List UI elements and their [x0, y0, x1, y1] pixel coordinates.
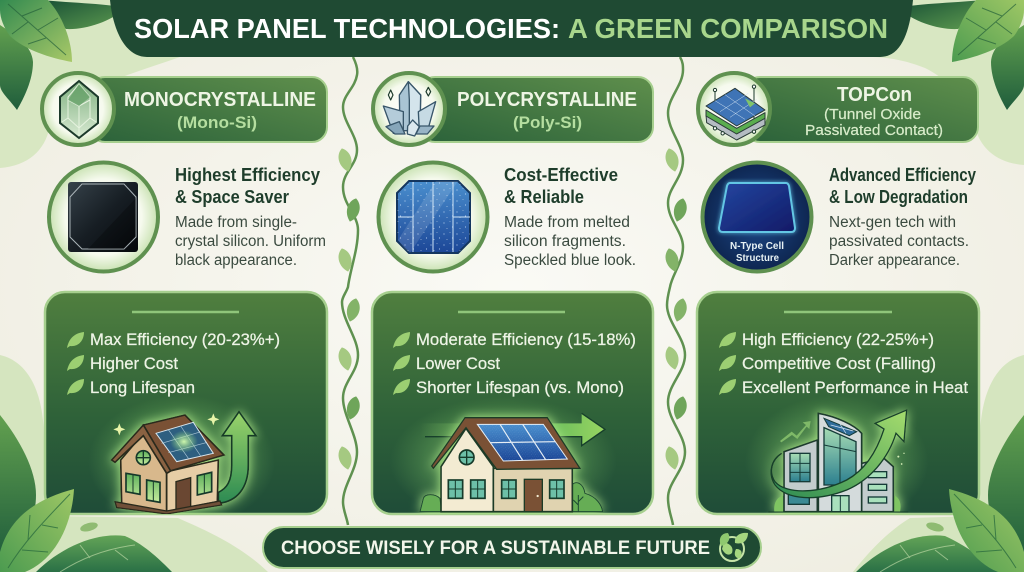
description: Next-gen tech with	[829, 214, 956, 231]
header pill: (Mono-Si)	[177, 113, 257, 132]
column: monocrystalline	[42, 73, 327, 528]
icon: n-type cell	[702, 162, 812, 272]
vine divider right	[663, 57, 689, 525]
heading: Highest Efficiency	[175, 165, 320, 185]
footer text: CHOOSE WISELY FOR A SUSTAINABLE FUTURE	[281, 538, 710, 559]
foreground leaf: bottom left	[0, 489, 74, 572]
heading	[504, 165, 618, 207]
header pill: TOPCon	[837, 84, 912, 106]
icon: layered cell	[698, 73, 770, 145]
column: polycrystalline	[372, 73, 653, 527]
header pill: (Poly-Si)	[513, 113, 582, 132]
feature list	[393, 331, 636, 397]
description: black appearance.	[175, 252, 297, 269]
feature list	[67, 331, 280, 397]
icon: black cell	[49, 162, 158, 272]
title banner	[110, 0, 913, 57]
description: crystal silicon. Uniform	[175, 233, 326, 250]
description: Darker appearance.	[829, 252, 960, 269]
column: TOPCon	[697, 73, 979, 528]
panel: poly features	[372, 292, 653, 527]
heading: Advanced Efficiency	[829, 165, 976, 185]
feature list: Higher Cost	[90, 355, 178, 373]
corner decoration: top left foliage	[0, 0, 180, 168]
header pill	[745, 77, 978, 142]
header pill: MONOCRYSTALLINE	[124, 89, 316, 111]
heading: Cost-Effective	[504, 165, 618, 185]
corner decoration: top right foliage	[850, 0, 1024, 165]
feature list: Max Efficiency (20-23%+)	[90, 331, 280, 349]
description: Made from single-	[175, 214, 297, 231]
vine divider left	[336, 57, 362, 525]
header pill	[90, 77, 327, 142]
description: silicon fragments.	[504, 233, 626, 250]
foreground leaf: bottom right	[949, 489, 1024, 572]
icon: crystal cluster	[373, 73, 445, 145]
feature list: Lower Cost	[416, 355, 500, 373]
header pill: POLYCRYSTALLINE	[457, 89, 637, 111]
heading	[829, 165, 976, 207]
heading: & Reliable	[504, 187, 584, 207]
title accent text: A GREEN COMPARISON	[568, 13, 888, 44]
footer banner	[263, 527, 761, 568]
panel: mono features	[45, 292, 327, 528]
heading: & Low Degradation	[829, 187, 968, 207]
icon: single crystal	[42, 73, 114, 145]
description	[504, 214, 636, 269]
icon: earth with leaves	[720, 533, 748, 561]
feature list: Competitive Cost (Falling)	[742, 355, 936, 373]
description	[829, 214, 969, 269]
description: Made from melted	[504, 214, 630, 231]
header pill	[420, 77, 653, 142]
illustration: buildings with swoosh arrow	[753, 401, 920, 514]
header pill: Passivated Contact)	[805, 122, 943, 139]
corner decoration: bottom left background foliage	[0, 355, 268, 572]
feature list: Excellent Performance in Heat	[742, 379, 968, 397]
description: passivated contacts.	[829, 233, 969, 250]
icon: blue cell	[378, 162, 488, 272]
feature list: Shorter Lifespan (vs. Mono)	[416, 379, 624, 397]
feature list: High Efficiency (22-25%+)	[742, 331, 934, 349]
icon: n-type cell: N-Type Cell	[730, 241, 784, 252]
heading: & Space Saver	[175, 187, 289, 207]
illustration: house with right arrow	[400, 403, 609, 514]
heading	[175, 165, 320, 207]
feature list	[719, 331, 968, 397]
panel: TOPCon features	[697, 292, 979, 528]
header pill: (Tunnel Oxide	[824, 106, 921, 123]
illustration: house with up arrow	[96, 402, 267, 514]
description	[175, 214, 326, 269]
icon: n-type cell: Structure	[736, 253, 779, 264]
feature list: Long Lifespan	[90, 379, 195, 397]
corner decoration: bottom right background foliage	[853, 355, 1024, 572]
feature list: Moderate Efficiency (15-18%)	[416, 331, 636, 349]
description: Speckled blue look.	[504, 252, 636, 269]
title text: SOLAR PANEL TECHNOLOGIES:	[134, 13, 560, 44]
